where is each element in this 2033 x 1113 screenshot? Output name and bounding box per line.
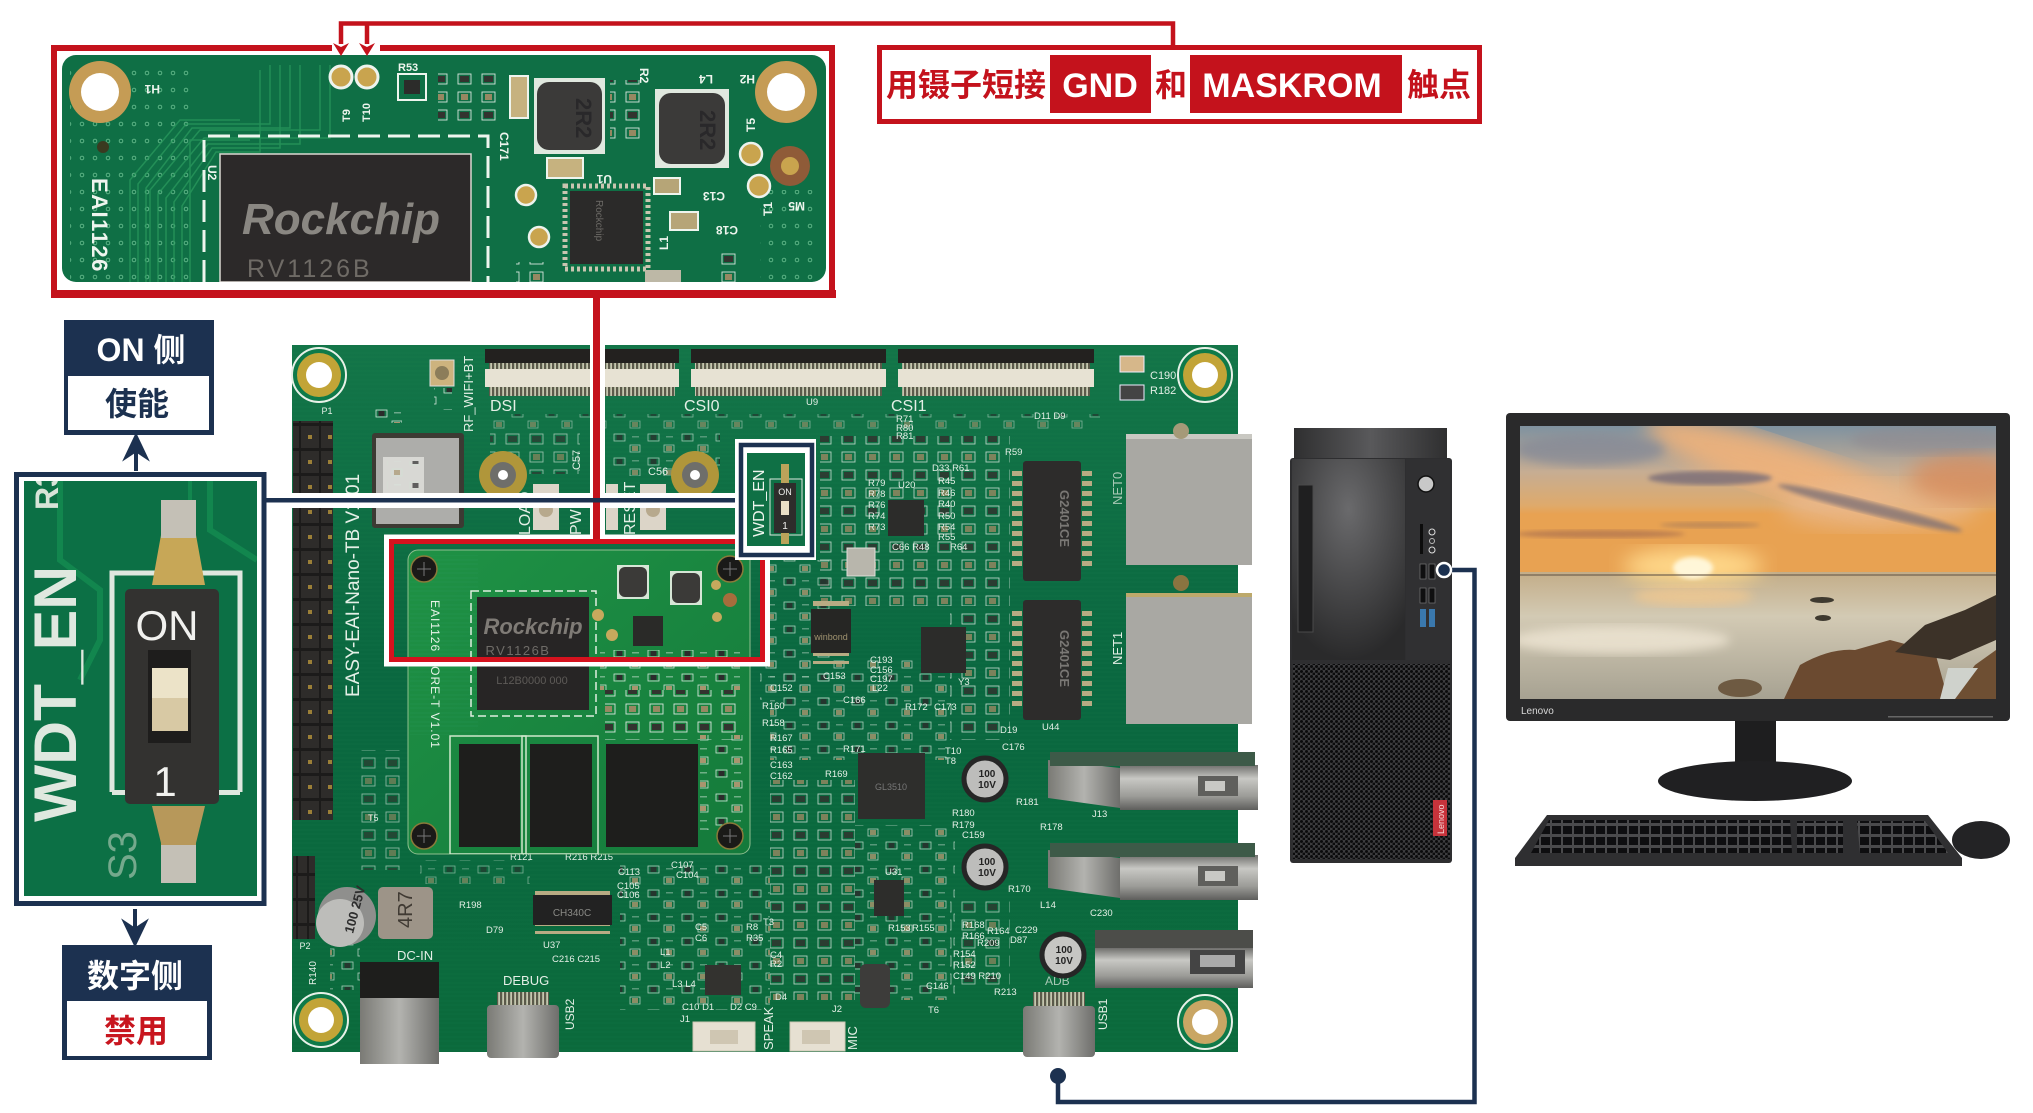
silk labels: U9	[806, 397, 818, 408]
silk text: EAI1126	[87, 178, 112, 273]
inductors	[534, 78, 729, 168]
network transformers	[1012, 461, 1092, 720]
capacitor 100uF and 4R7 inductor: 100 25V	[341, 884, 369, 935]
module photo: R2	[637, 68, 651, 84]
switch photo: ON	[136, 602, 198, 649]
silk labels: R45	[938, 476, 955, 487]
panel frame	[54, 48, 832, 295]
Lenovo badge: Lenovo	[1436, 804, 1446, 834]
stand neck	[1735, 721, 1776, 765]
electrolytic capacitors: 10V	[978, 780, 996, 791]
silk labels: L2	[660, 960, 671, 971]
silk labels: R158	[762, 718, 785, 729]
silk labels: C146	[926, 981, 949, 992]
module photo	[62, 55, 826, 283]
red connector line	[593, 298, 600, 539]
silk labels	[299, 356, 1176, 1050]
mouse	[1952, 821, 2010, 859]
monitor buttons	[1888, 716, 1993, 718]
module photo: L4	[699, 72, 713, 86]
silk labels: ADB	[1045, 974, 1070, 988]
network transformers: G2401CE	[1057, 490, 1072, 547]
module photo: M5	[788, 199, 805, 213]
label: disable: 禁用	[104, 1013, 168, 1049]
white band behind connector	[266, 493, 736, 508]
silk labels: C149 R210	[953, 971, 1001, 982]
callout text left: 用镊子短接	[886, 67, 1046, 103]
silk labels: Y3	[958, 677, 970, 688]
silk labels: R216 R215	[565, 852, 613, 863]
small switch highlight: 1	[782, 521, 788, 532]
silk labels: R78	[868, 489, 885, 500]
silk labels: R170	[1008, 884, 1031, 895]
inductors and QFN	[592, 565, 737, 646]
mesh grille	[1293, 664, 1450, 859]
silk labels: L3 L4	[672, 979, 696, 990]
silk labels: R71	[896, 414, 913, 425]
SoC chip	[471, 591, 596, 716]
network transformers: G2401CE	[1057, 630, 1072, 687]
silk labels: R160	[762, 701, 785, 712]
mounting holes	[69, 61, 817, 153]
silk labels: PWR	[568, 498, 585, 535]
Lenovo badge	[1433, 800, 1447, 836]
silk labels: R35	[746, 933, 763, 944]
silk labels: C190	[1150, 370, 1176, 382]
other chips: CH340C	[553, 908, 591, 919]
silk labels: R179	[952, 820, 975, 831]
callout: tweezers instruction	[880, 48, 1480, 122]
QFN chip: Rockchip	[593, 200, 604, 242]
switch photo: R3	[29, 469, 65, 510]
silk labels: U37	[543, 940, 560, 951]
electrolytic capacitors: 100	[979, 857, 996, 868]
silk labels: NET1	[1110, 632, 1125, 665]
module photo: U1	[596, 172, 612, 186]
silk labels: D11 D9	[1034, 411, 1066, 422]
silk labels: C229	[1015, 925, 1038, 936]
switch photo	[22, 469, 257, 896]
silk labels: R76	[868, 500, 885, 511]
silk labels: T8	[945, 756, 956, 767]
silk labels: R140	[308, 961, 319, 985]
connector word: 和	[1155, 67, 1187, 103]
silk labels: USB2	[563, 998, 577, 1030]
Rockchip chip: Rockchip	[242, 195, 440, 244]
silk labels: T5	[368, 813, 379, 823]
label: ON side: ON 侧	[97, 332, 185, 368]
callout text right: 触点	[1407, 67, 1471, 103]
mounting holes	[292, 348, 1232, 1049]
frame	[16, 474, 264, 904]
MASKROM tag: MASKROM	[1202, 67, 1382, 105]
front ports	[1420, 524, 1435, 627]
silk labels: C193	[870, 655, 893, 666]
module photo: T10	[361, 103, 373, 122]
silk labels: C106	[617, 890, 640, 901]
silk labels: C5	[695, 922, 707, 933]
silk labels: R64	[950, 542, 967, 553]
silk labels: R2	[770, 959, 782, 970]
other chips: winbond	[813, 632, 848, 642]
electrolytic capacitors: 10V	[1055, 956, 1073, 967]
silk labels: CSI1	[891, 398, 927, 415]
silk labels: C162	[770, 771, 793, 782]
electrolytic capacitors: 10V	[978, 868, 996, 879]
screws	[411, 556, 743, 849]
module photo: H1	[144, 82, 160, 96]
QFN chip	[565, 186, 648, 269]
module photo: T9	[341, 109, 353, 122]
module photo: L1	[657, 236, 671, 250]
silk labels: LOAD	[517, 491, 534, 535]
core module	[408, 550, 750, 854]
silk labels: R166	[962, 931, 985, 942]
silk labels: R73	[868, 522, 885, 533]
silk labels: C107	[671, 860, 694, 871]
module photo: C13	[703, 189, 725, 203]
silk labels: MIC	[845, 1026, 860, 1050]
silk labels: D4	[775, 992, 787, 1003]
silk labels: C152	[770, 683, 793, 694]
module photo: C18	[716, 223, 738, 237]
silk labels: R171	[843, 744, 866, 755]
zoom panel: core module top	[51, 48, 836, 298]
silk labels: C113	[618, 867, 640, 878]
red arrows to test pads	[333, 24, 1173, 56]
silk labels: D79	[486, 925, 503, 936]
label: digit side: 数字侧	[87, 958, 183, 994]
other chips: GL3510	[875, 782, 907, 792]
silk labels: NET0	[1110, 472, 1125, 505]
silk labels: R50	[938, 511, 955, 522]
silk labels: C166	[843, 695, 866, 706]
silk labels: U44	[1042, 722, 1059, 733]
MASKROM tag	[1190, 55, 1402, 113]
inductors: 2R2	[571, 98, 596, 138]
silk labels: R80	[896, 423, 913, 434]
silk labels: R164	[987, 926, 1010, 937]
silk labels: C10 D1	[682, 1002, 714, 1013]
flash chips	[450, 736, 698, 854]
electrolytic capacitors	[964, 758, 1084, 976]
silk labels: R169	[825, 769, 848, 780]
silk labels: EASY-EAI-Nano-TB V1.01	[343, 474, 364, 697]
silk labels: DC-IN	[397, 948, 433, 963]
small switch highlight: ON	[778, 487, 792, 497]
silk labels: R209	[977, 938, 1000, 949]
module photo: U2	[205, 165, 219, 181]
silk: WDT_EN	[22, 566, 89, 822]
resistor block: R53	[398, 62, 418, 74]
silk labels: C56	[648, 466, 668, 478]
white halo behind red connector	[590, 345, 605, 539]
silk labels: R168	[962, 920, 985, 931]
PC tower	[1290, 428, 1452, 863]
silk labels: C153	[823, 671, 846, 682]
left pin headers	[293, 421, 333, 939]
silk labels: T10	[945, 746, 961, 757]
silk labels: D33 R61	[932, 463, 970, 474]
silk labels: R213	[994, 987, 1017, 998]
label: enable: 使能	[105, 386, 169, 422]
silk labels: R59	[1005, 447, 1022, 458]
silk labels: R180	[952, 808, 975, 819]
silk labels: R172	[905, 702, 928, 713]
switch photo: S3	[101, 831, 145, 880]
silk labels: L22	[872, 683, 888, 694]
silk labels: J13	[1092, 809, 1107, 820]
silk labels: R178	[1040, 822, 1063, 833]
silk labels: R74	[868, 511, 885, 522]
silk labels: C216 C215	[552, 954, 600, 965]
silk labels: C163	[770, 760, 793, 771]
tactile buttons	[533, 484, 666, 530]
electrolytic capacitors: 100	[979, 769, 996, 780]
module photo: C171	[497, 132, 511, 161]
silk labels: P1	[321, 406, 333, 416]
module photo: T1	[761, 202, 775, 216]
silk labels: R55	[938, 532, 955, 543]
other chips	[533, 500, 966, 1008]
silk labels: P2	[299, 941, 311, 951]
silk labels: D87	[1010, 935, 1027, 946]
silk labels: D2 C9	[730, 1002, 757, 1013]
capacitor 100uF and 4R7 inductor: 4R7	[395, 891, 417, 928]
silk labels: C159	[962, 830, 985, 841]
silk labels: R181	[1016, 797, 1039, 808]
silk labels: R154	[953, 949, 976, 960]
GND tag	[1050, 55, 1151, 113]
main development board	[292, 345, 1258, 1064]
silk labels: C66 R48	[892, 542, 930, 553]
arrow up	[127, 437, 145, 471]
WiFi module	[372, 433, 464, 528]
bezel	[1506, 413, 2010, 721]
silk labels: R40	[938, 499, 955, 510]
trace bundles	[130, 65, 330, 282]
USB-C and DC connectors	[360, 962, 1095, 1064]
silk labels: C4	[770, 950, 782, 961]
navy connector from switch zoom	[266, 498, 740, 502]
silk labels: C57	[571, 450, 583, 470]
silk labels: R182	[1150, 385, 1176, 397]
SoC chip: RV1126B	[486, 643, 550, 658]
PCB base	[292, 345, 1238, 1052]
switch body	[125, 589, 219, 804]
silk labels: T6	[928, 1005, 939, 1016]
silk labels: T3	[763, 917, 774, 928]
silk labels: DSI	[490, 398, 517, 415]
tower top	[1294, 428, 1447, 458]
zoom panel: WDT switch	[16, 469, 264, 904]
red box on core module	[386, 537, 768, 664]
silk labels: USB1	[1096, 998, 1110, 1030]
FPC connectors	[485, 349, 1094, 396]
silk labels: R81	[896, 431, 913, 442]
silk labels: RESET	[622, 481, 639, 535]
silk labels: R165	[770, 745, 793, 756]
Rockchip chip: RV1126B	[247, 255, 373, 283]
silk labels: R153	[888, 923, 911, 934]
pads and passives	[516, 143, 810, 282]
silk labels: U31	[885, 867, 902, 878]
small switch highlight	[735, 439, 816, 560]
inductors: 2R2	[695, 110, 720, 150]
SoC chip: Rockchip	[483, 614, 583, 639]
silk labels: J1	[680, 1014, 690, 1025]
power button	[1418, 476, 1434, 492]
silk labels: D19	[1000, 725, 1017, 736]
label box: ON side enable	[64, 320, 214, 435]
silk labels: C176	[1002, 742, 1025, 753]
silk labels: R152	[953, 960, 976, 971]
silk labels: C230	[1090, 908, 1113, 919]
silk labels: U20	[898, 480, 915, 491]
test pads MASKROM GND	[330, 66, 378, 88]
USB cable from board to PC	[1050, 563, 1474, 1102]
silk labels: L14	[1040, 900, 1056, 911]
leads	[152, 535, 205, 585]
keyboard	[1515, 815, 1962, 866]
silk labels: R54	[938, 522, 955, 533]
stand base	[1658, 761, 1852, 801]
label box: digit side disable	[62, 945, 212, 1060]
electrolytic capacitors: 100	[1056, 945, 1073, 956]
silk labels: DEBUG	[503, 973, 549, 988]
optical drive	[1298, 485, 1313, 632]
silk labels: R79	[868, 478, 885, 489]
module photo: T5	[744, 118, 758, 132]
Rockchip chip	[220, 154, 471, 283]
silk labels: SPEAK	[761, 1006, 776, 1050]
switch photo: 1	[153, 758, 177, 805]
silk labels: C105	[617, 881, 640, 892]
sunset screen	[1520, 426, 1996, 699]
monitor brand: Lenovo	[1521, 706, 1554, 717]
tower front panel	[1290, 458, 1452, 863]
silk labels: RF_WIFI+BT	[461, 356, 476, 432]
silk labels: R46	[938, 488, 955, 499]
monitor	[1506, 400, 2020, 801]
capacitor 100uF and 4R7 inductor	[316, 884, 433, 947]
USB ports	[1048, 752, 1258, 988]
silk labels: C156	[870, 665, 893, 676]
silk labels: R198	[459, 900, 482, 911]
resistor block	[397, 64, 640, 138]
silk labels: C104	[676, 870, 699, 881]
small component fields	[330, 414, 1100, 1010]
silk labels: C197	[870, 674, 893, 685]
module photo: H2	[739, 72, 755, 86]
silk labels: C173	[934, 702, 957, 713]
arrow down	[126, 909, 144, 943]
silk labels: R155	[912, 923, 935, 934]
silk labels: R121	[510, 852, 533, 863]
RF connector and small parts	[372, 356, 1144, 423]
audio connectors	[693, 1022, 845, 1051]
ethernet jacks	[1126, 423, 1252, 724]
silk labels: J2	[832, 1004, 842, 1015]
silk labels: C6	[695, 933, 707, 944]
silk labels: R167	[770, 733, 793, 744]
dashed SoC outline	[204, 136, 488, 282]
GND tag: GND	[1062, 67, 1138, 105]
silk labels: R8	[746, 922, 758, 933]
SoC chip: L12B0000 000	[496, 675, 568, 687]
small switch highlight: WDT_EN	[751, 469, 768, 537]
silk labels: CSI0	[684, 398, 720, 415]
core silk text: EAI1126 CORE-T V1.01	[428, 600, 442, 749]
silk labels: L1	[660, 947, 671, 958]
